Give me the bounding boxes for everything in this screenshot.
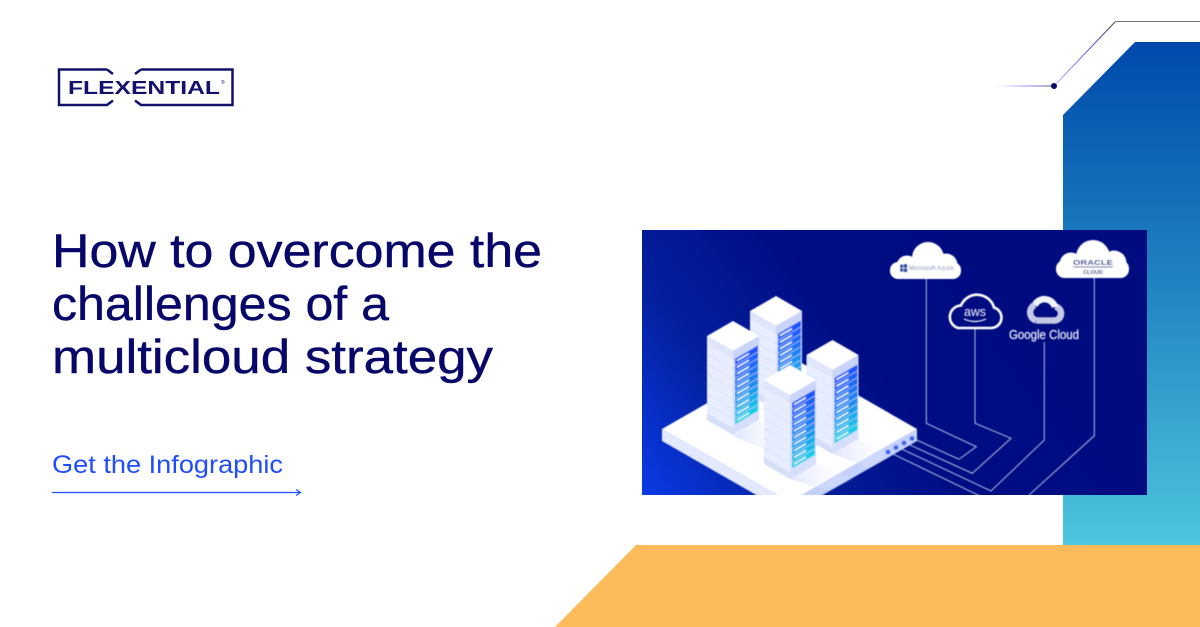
server rack: front [764,365,816,479]
cloud: Microsoft Azure [890,242,961,279]
call to action with arrow: Get the Infographic [52,451,283,479]
title: multicloud strategy [52,330,494,383]
cloud: Oracle Cloud [1056,240,1129,278]
port dots [886,436,914,454]
cloud: AWS: aws [964,304,986,319]
logo: Flexential [59,70,232,105]
logo: Flexential: FLEXENTIAL [68,77,220,98]
cloud: Microsoft Azure: Microsoft Azure [909,265,954,272]
title: How to overcome the [52,224,542,277]
cloud: Google Cloud: Google Cloud [1009,327,1079,342]
title [52,224,542,383]
server rack: back [750,296,802,410]
panel: multicloud illustration [642,230,1147,514]
title: challenges of a [52,277,390,330]
cloud: Oracle Cloud: CLOUD [1083,270,1103,276]
cloud: Google Cloud [1009,299,1079,342]
cloud: Oracle Cloud: ORACLE [1073,258,1113,267]
server platform [661,362,918,495]
server rack: left [707,321,759,435]
logo: Flexential: ® [221,79,225,86]
circuit line with node [994,22,1200,89]
connector lines [893,278,1094,496]
cloud: AWS [950,295,1001,328]
call to action with arrow [52,451,300,496]
server rack: right [806,340,858,454]
orange footer shape [555,545,1200,627]
decorative blue band [1063,42,1200,545]
